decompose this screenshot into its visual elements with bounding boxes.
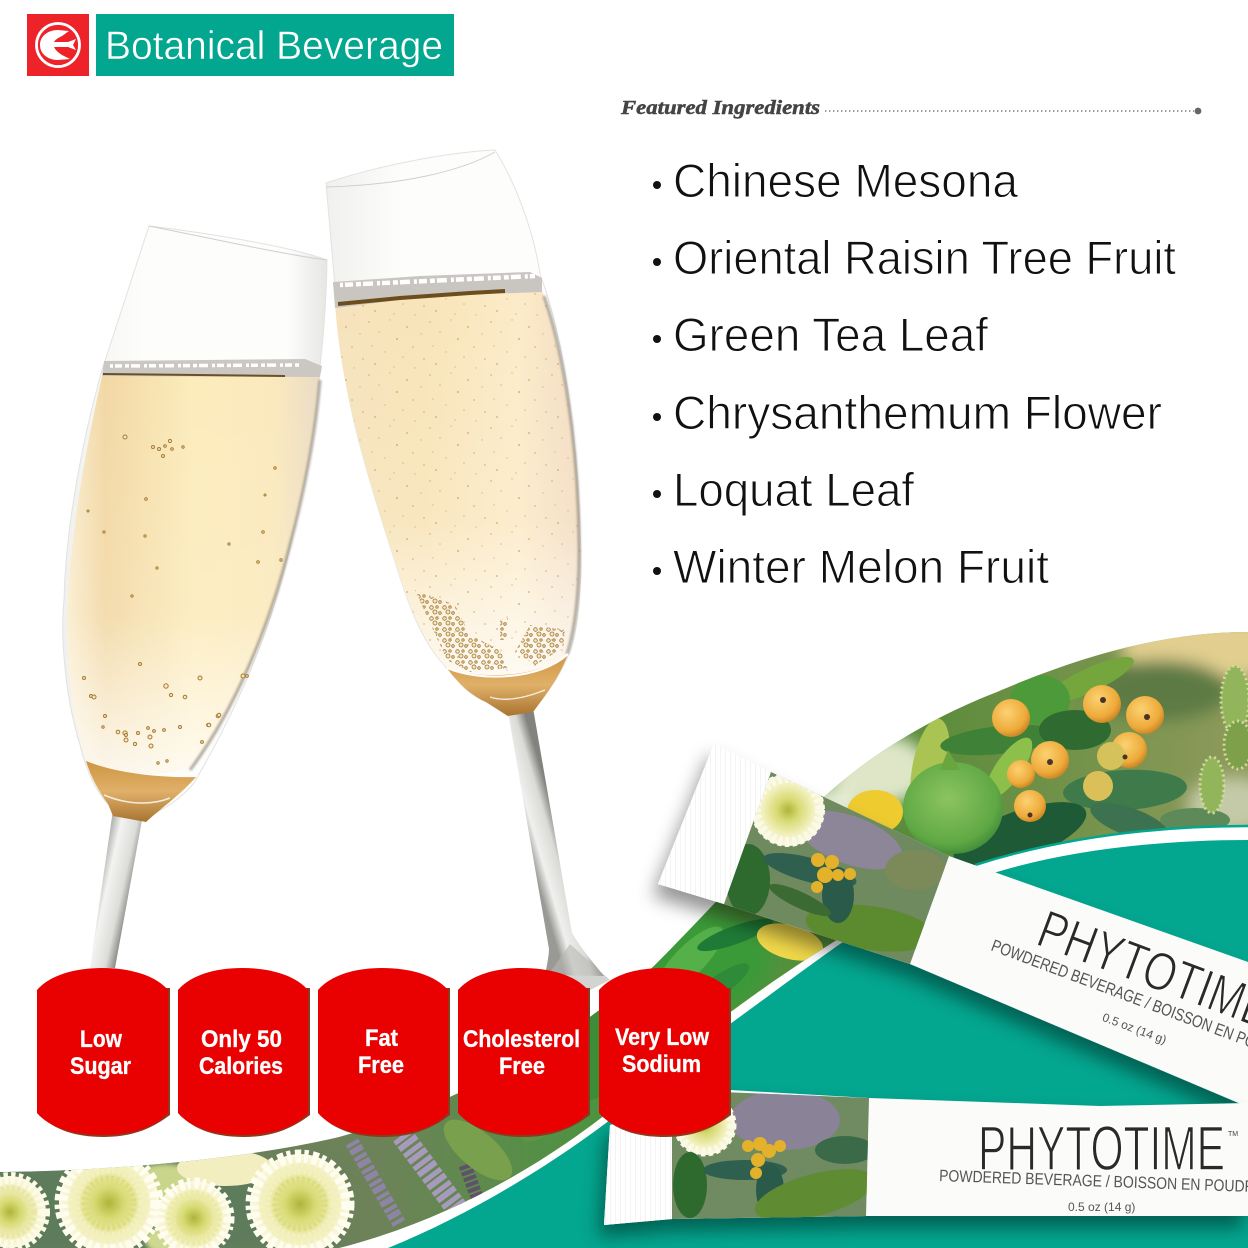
badge: very low sodium	[599, 968, 731, 1137]
icon: green winter melon	[903, 750, 1003, 854]
badge: cholesterol free: Free	[499, 1053, 545, 1080]
ingredient 4: Chrysanthemum Flower	[673, 386, 1162, 439]
ingredient 5: Loquat Leaf	[673, 463, 915, 516]
badge: low sugar: Sugar	[70, 1053, 131, 1080]
badge: fat free: Fat	[365, 1025, 398, 1052]
icon: green leaves lower left	[434, 913, 776, 1191]
icon: flowering herb cluster	[1200, 666, 1248, 813]
icon: orange loquat fruits	[992, 685, 1164, 822]
right amber base	[447, 654, 568, 716]
badge: fat free	[318, 968, 450, 1137]
ingredient 6: Winter Melon Fruit	[673, 540, 1049, 593]
ingredients list	[653, 154, 1176, 593]
liquid	[67, 376, 320, 773]
featured ingredients heading	[620, 97, 1201, 119]
amber base	[86, 761, 196, 822]
badge: only 50 calories	[178, 968, 310, 1137]
lower sachet botanical print	[672, 1092, 869, 1219]
sachet botanical print	[724, 772, 949, 964]
title banner: Botanical Beverage	[105, 24, 443, 68]
lower sachet brand text	[939, 1114, 1248, 1214]
icon: red swallow logo	[27, 14, 89, 76]
icon: fruit calyx marks	[1028, 697, 1150, 818]
badge: very low sodium: Very Low	[615, 1024, 709, 1051]
title banner	[96, 14, 454, 76]
badge: low sugar	[37, 968, 170, 1137]
badge: fat free: Free	[358, 1052, 404, 1079]
right liquid	[335, 290, 580, 675]
icon: chrysanthemum flowers	[0, 1150, 350, 1248]
badge: cholesterol free	[458, 968, 590, 1137]
bubble clusters	[415, 590, 565, 672]
lower sachet crimp end	[604, 1120, 672, 1225]
right foam	[333, 272, 542, 308]
badge: very low sodium: Sodium	[622, 1051, 701, 1078]
icon: yellow flower	[753, 790, 903, 967]
product sachet: upper	[658, 744, 1248, 1107]
champagne glass: right	[326, 150, 610, 990]
icon: purple flower spikes	[352, 1135, 478, 1225]
nutrition badges	[37, 968, 731, 1137]
featured ingredients heading: Featured Ingredients	[620, 97, 820, 119]
lower sachet brand text: TM	[1228, 1131, 1238, 1138]
product sachet: lower	[604, 1088, 1248, 1231]
champagne glass: left	[63, 226, 327, 968]
right glass stem	[508, 708, 604, 976]
badge: only 50 calories: Calories	[199, 1053, 283, 1080]
glass stem	[90, 810, 142, 968]
badge: low sugar: Low	[80, 1026, 122, 1053]
sachet brand text: 0.5 oz (14 g)	[1100, 1010, 1168, 1047]
ingredient 1: Chinese Mesona	[673, 154, 1019, 207]
badge: only 50 calories: Only 50	[201, 1026, 282, 1053]
glass bowl	[63, 226, 327, 816]
header: logo and category title	[27, 14, 454, 76]
badge: cholesterol free: Cholesterol	[463, 1026, 580, 1053]
bubbles	[82, 435, 282, 764]
teal swoosh background	[388, 840, 1248, 1248]
sachet crimp end	[658, 744, 771, 904]
right glass bowl	[326, 150, 581, 716]
lower sachet brand text: 0.5 oz (14 g)	[1068, 1200, 1135, 1214]
foam	[102, 359, 322, 377]
ingredient 2: Oriental Raisin Tree Fruit	[673, 231, 1176, 284]
ingredient 3: Green Tea Leaf	[673, 308, 989, 361]
icon: loquat leaves	[910, 657, 1230, 866]
botanical photo band	[0, 618, 1248, 1248]
